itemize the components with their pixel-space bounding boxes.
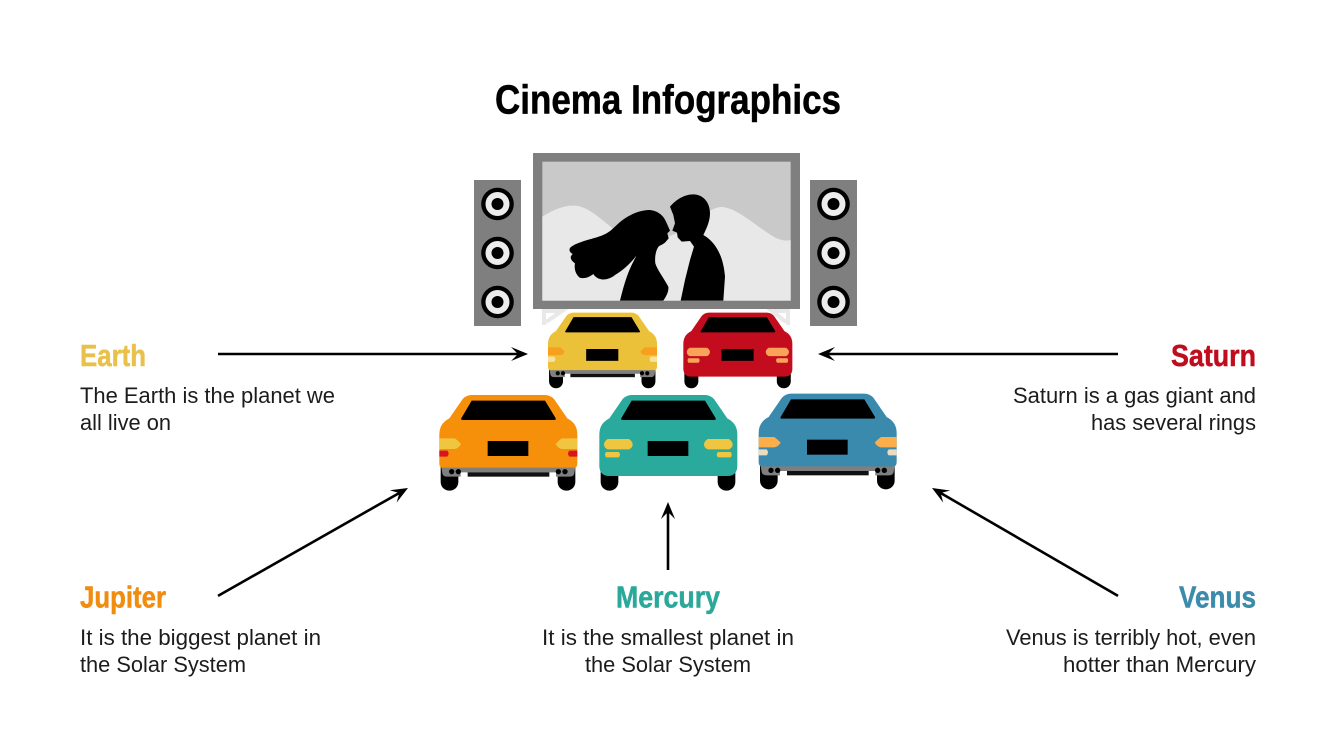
arrow: Jupiter to orange car (215, 482, 411, 602)
arrow: Earth to yellow car (218, 347, 528, 361)
movie scene: couple silhouette (569, 194, 725, 301)
text block: Jupiter: Jupiter (80, 580, 166, 614)
arrow: Venus to blue car (928, 482, 1122, 602)
text block: Venus (1006, 580, 1256, 677)
text block: Saturn: Saturn (1171, 338, 1256, 373)
text block: Venus: hotter than Mercury (1063, 652, 1256, 677)
text block: Saturn: has several rings (1091, 410, 1256, 435)
movie scene: sky and hills (542, 162, 791, 301)
text block: Jupiter: the Solar System (80, 652, 246, 677)
text block: Saturn: Saturn is a gas giant and (1013, 383, 1256, 408)
text block: Earth: all live on (80, 410, 171, 435)
title: Cinema Infographics (495, 76, 841, 122)
screen frame (533, 153, 800, 309)
text block: Mercury: It is the smallest planet in (542, 625, 794, 650)
text block: Venus: Venus is terribly hot, even (1006, 625, 1256, 650)
text block: Earth (80, 338, 335, 435)
screen stand (544, 311, 788, 325)
car: yellow (548, 313, 657, 388)
text block: Jupiter (80, 580, 321, 677)
text block: Jupiter: It is the biggest planet in (80, 625, 321, 650)
arrow: Mercury to teal car (661, 502, 675, 570)
text block: Saturn (1013, 338, 1256, 435)
arrow: Saturn to red car (818, 347, 1118, 361)
text block: Venus: Venus (1179, 580, 1256, 614)
cars (439, 313, 897, 491)
car: red (683, 313, 792, 388)
text block: Earth: The Earth is the planet we (80, 383, 335, 408)
text block: Mercury (542, 580, 794, 677)
text block: Mercury: Mercury (616, 580, 721, 614)
text block: Mercury: the Solar System (585, 652, 751, 677)
left speaker (474, 180, 521, 326)
car: blue (759, 394, 897, 489)
car: teal (599, 395, 737, 491)
text block: Earth: Earth (80, 338, 146, 373)
car: orange (439, 395, 577, 491)
right speaker (810, 180, 857, 326)
cinema screen with speakers (474, 153, 857, 326)
